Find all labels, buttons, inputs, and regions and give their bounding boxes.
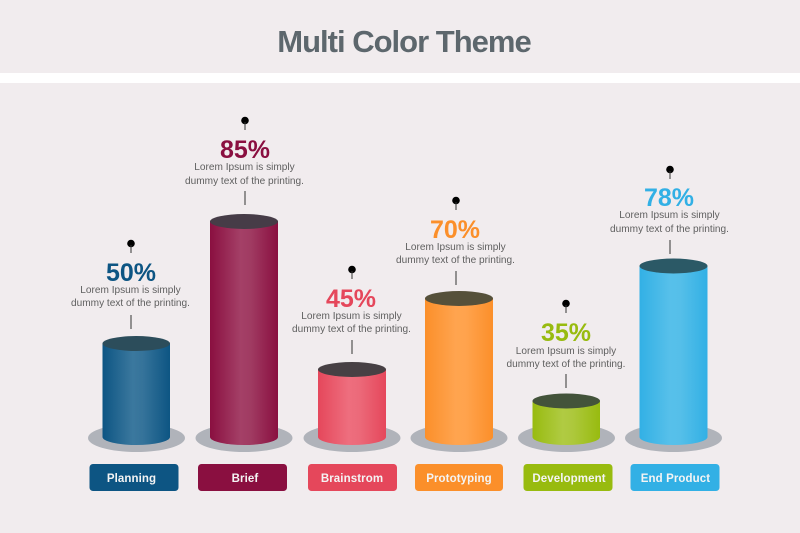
cylinder [102,343,170,445]
label: Prototyping [426,473,492,485]
value: 50% [106,259,156,287]
value: 70% [430,216,480,244]
cylinder [210,221,278,445]
connector [566,374,567,388]
label: End Product [641,473,710,485]
column: Development [507,300,625,491]
description: dummy text of the printing. [71,298,190,309]
shadow [625,424,722,452]
description: dummy text of the printing. [396,255,515,266]
pin [241,117,249,130]
column: Planning [71,240,190,491]
cylinder [640,266,708,445]
description: dummy text of the printing. [185,176,304,187]
label [524,464,612,491]
description: Lorem Ipsum is simply [619,210,721,221]
description: dummy text of the printing. [507,359,625,370]
description: Lorem Ipsum is simply [301,311,403,322]
cylinder [425,298,493,445]
shadow [304,424,400,452]
pin [348,266,356,279]
label: Development [532,473,606,485]
label [415,464,503,491]
cylinder top [102,336,170,351]
pin [127,240,135,253]
connector [670,240,671,254]
cylinder top [318,362,386,377]
label: Planning [107,473,156,485]
column: Prototyping [396,197,515,491]
description: Lorem Ipsum is simply [194,162,296,173]
cylinder top [640,258,708,274]
pin [452,197,460,210]
shadow [410,424,508,452]
cylinder [318,369,386,445]
value: 35% [541,319,591,347]
connector [352,340,353,354]
value: 85% [220,136,270,164]
pin [562,300,570,313]
title: Multi Color Theme [277,24,531,59]
value: 78% [644,184,694,212]
pin [666,166,674,179]
column: Brief [185,117,304,491]
shadow [196,424,292,452]
column: End Product [610,166,729,491]
label [198,464,287,491]
cylinder top [210,214,278,229]
cylinder top [425,291,493,306]
description: dummy text of the printing. [610,224,729,235]
shadow [518,424,615,452]
description: Lorem Ipsum is simply [80,285,182,296]
description: dummy text of the printing. [292,324,411,335]
label: Brainstrom [321,473,383,485]
description: Lorem Ipsum is simply [516,346,617,357]
cylinder [532,401,600,445]
white header divider band [0,73,800,83]
label [90,464,178,491]
connector [130,315,132,329]
cylinder top [532,394,600,408]
label [630,464,720,491]
label: Brief [232,473,258,485]
connector [244,191,246,205]
connector [456,271,457,285]
shadow [88,424,185,452]
column: Brainstrom [292,266,411,491]
value: 45% [326,285,376,313]
description: Lorem Ipsum is simply [405,242,507,253]
label [308,464,397,491]
